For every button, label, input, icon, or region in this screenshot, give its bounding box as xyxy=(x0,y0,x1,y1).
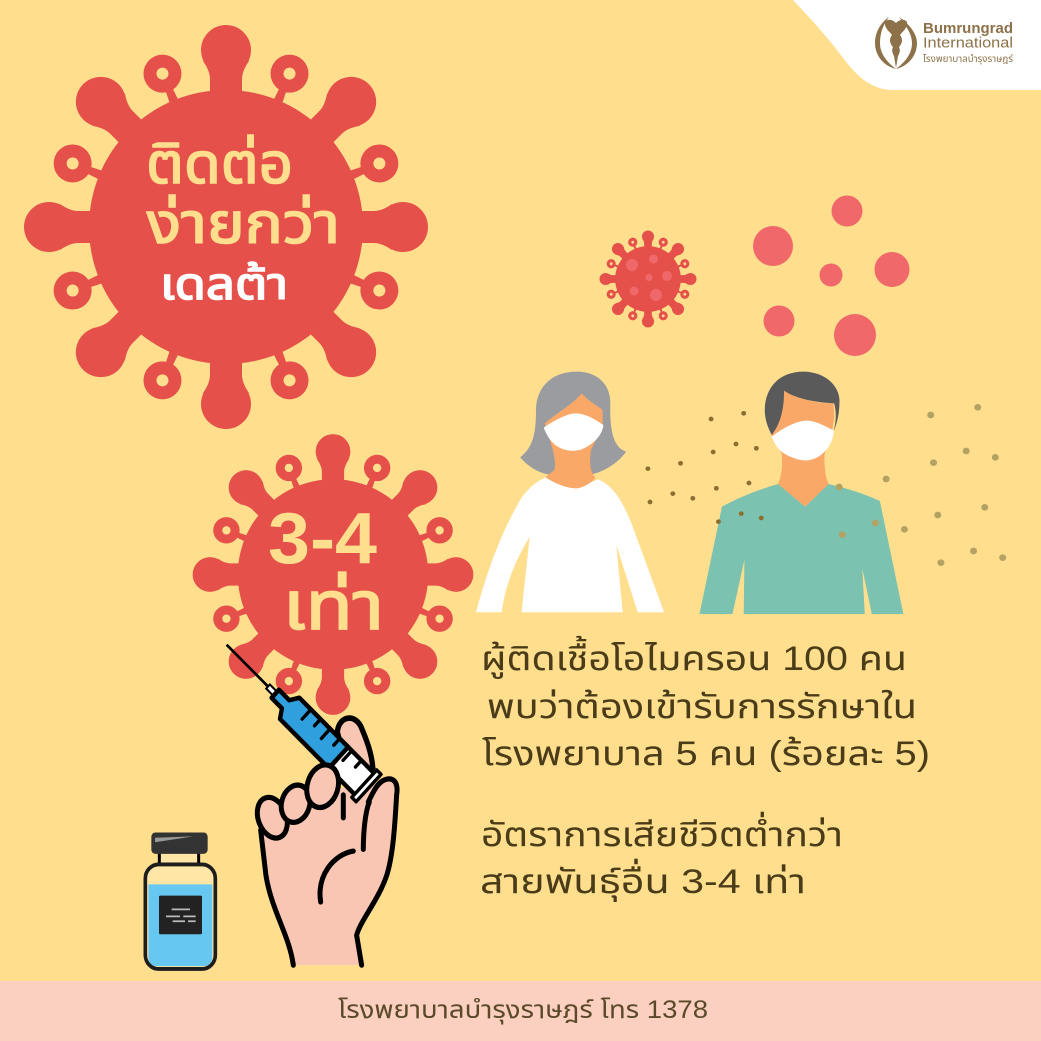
vial body xyxy=(145,864,215,969)
palm outline xyxy=(261,779,397,965)
big virus with heading xyxy=(24,25,428,429)
ring finger xyxy=(277,781,315,826)
footer text: โรงพยาบาลบำรุงราษฎร์ โทร 1378 xyxy=(338,996,708,1025)
small virus illustration xyxy=(600,231,696,327)
virus shape: medium xyxy=(193,434,473,715)
vial cap xyxy=(151,832,208,854)
man shirt xyxy=(699,484,903,614)
man hair xyxy=(765,372,839,435)
icon: caduceus emblem xyxy=(875,17,917,69)
raised finger xyxy=(337,718,373,777)
text line 5: สายพันธุ์อื่น 3-4 เท่า xyxy=(480,858,806,902)
syringe barrel blue xyxy=(266,683,348,768)
syringe hub xyxy=(266,684,277,696)
body text: mortality xyxy=(480,811,843,902)
heading line 3: เดลต้า xyxy=(160,260,288,309)
woman body xyxy=(476,477,664,612)
woman mask xyxy=(544,413,603,451)
logo wordmark: Bumrungrad xyxy=(923,20,1013,37)
syringe xyxy=(214,631,381,802)
vaccine vial xyxy=(145,832,215,969)
heading line 2: ง่ายกว่า xyxy=(147,192,340,255)
virus spots xyxy=(626,254,672,301)
people illustration xyxy=(476,372,1006,614)
floating droplets xyxy=(753,196,910,356)
vial neck xyxy=(159,851,199,867)
second virus with 3-4 times xyxy=(193,434,473,715)
vial label lines xyxy=(166,909,196,921)
virus shape: large xyxy=(24,25,428,429)
man xyxy=(699,372,903,614)
body text: hospitalisation xyxy=(481,635,930,773)
footer band xyxy=(0,981,1041,1041)
hand holding syringe xyxy=(214,631,397,965)
palm fill xyxy=(261,779,397,965)
vial label xyxy=(159,896,202,934)
dark particles xyxy=(645,411,764,524)
logo: Bumrungrad International xyxy=(875,17,1013,69)
pinky finger xyxy=(252,793,293,843)
man mask xyxy=(772,421,834,460)
text line 2: พบว่าต้องเข้ารับการรักษาใน xyxy=(487,688,917,726)
woman hair xyxy=(520,372,626,475)
woman face and neck xyxy=(545,393,603,488)
syringe flange xyxy=(352,770,381,802)
virus shape: small xyxy=(600,231,696,327)
heading line 1: ติดต่อ xyxy=(146,132,293,195)
syringe needle xyxy=(226,644,270,689)
light particles xyxy=(836,404,1006,566)
logo thai name: โรงพยาบาลบำรุงราษฎร์ xyxy=(923,53,1013,65)
text line 3: โรงพยาบาล 5 คน (ร้อยละ 5) xyxy=(482,735,930,773)
vial cap highlight xyxy=(155,836,193,842)
woman xyxy=(476,372,664,612)
logo panel: white corner xyxy=(793,0,1041,90)
logo subtitle: International xyxy=(923,34,1013,52)
text line 1: ผู้ติดเชื้อโอไมครอน 100 คน xyxy=(481,635,907,679)
man face and neck xyxy=(772,391,834,507)
syringe barrel white xyxy=(329,747,375,795)
syringe ticks xyxy=(302,709,361,770)
text line 4: อัตราการเสียชีวิตต่ำกว่า xyxy=(481,811,843,854)
middle finger xyxy=(302,760,344,812)
number 3-4: 3-4 xyxy=(268,499,377,579)
vial liquid xyxy=(148,884,212,966)
label times: เท่า xyxy=(283,569,384,644)
